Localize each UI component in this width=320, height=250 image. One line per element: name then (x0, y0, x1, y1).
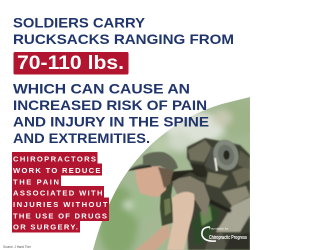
callout: 70-110 lbs: 70-110 lbs. (17, 52, 124, 74)
source note: Source: J Hand Ther (3, 245, 32, 249)
callout: chiropractors work to reduce pain: ASSOCIATED WITH (13, 188, 102, 198)
text block: risk of pain and injury: WHICH CAN CAUSE AN (13, 82, 190, 96)
logo: Foundation for Chiropractic Progress (202, 226, 247, 241)
rucksack (170, 138, 250, 250)
logo: Foundation for Chiropractic Progress: Foundation for (209, 226, 228, 230)
text block: risk of pain and injury: INCREASED RISK OF PAIN (13, 98, 207, 113)
callout: chiropractors work to reduce pain: OR SURGERY. (13, 222, 78, 232)
callout: chiropractors work to reduce pain: THE USE OF DRUGS (13, 212, 107, 220)
callout: chiropractors work to reduce pain: WORK TO REDUCE (13, 166, 100, 175)
callout: chiropractors work to reduce pain: THE PAIN (13, 178, 59, 186)
heading: soldiers carry rucksacks (13, 16, 234, 47)
heading: soldiers carry rucksacks: RUCKSACKS RANGING FROM (13, 32, 234, 47)
text block: risk of pain and injury: AND INJURY IN THE SPINE (13, 114, 209, 130)
rolled sleeping mat (205, 139, 240, 172)
text block: risk of pain and injury (13, 82, 209, 146)
callout: chiropractors work to reduce pain: INJURIES WITHOUT (13, 200, 108, 209)
callout: chiropractors work to reduce pain: CHIROPRACTORS (13, 154, 96, 164)
text block: risk of pain and injury: AND EXTREMITIES. (13, 131, 150, 146)
soldier head and cap (128, 152, 178, 197)
heading: soldiers carry rucksacks: SOLDIERS CARRY (13, 16, 145, 30)
callout: chiropractors work to reduce pain (12, 152, 109, 232)
soldier arm, body and shirt (135, 170, 210, 250)
photo: soldier with rucksack (93, 97, 250, 250)
